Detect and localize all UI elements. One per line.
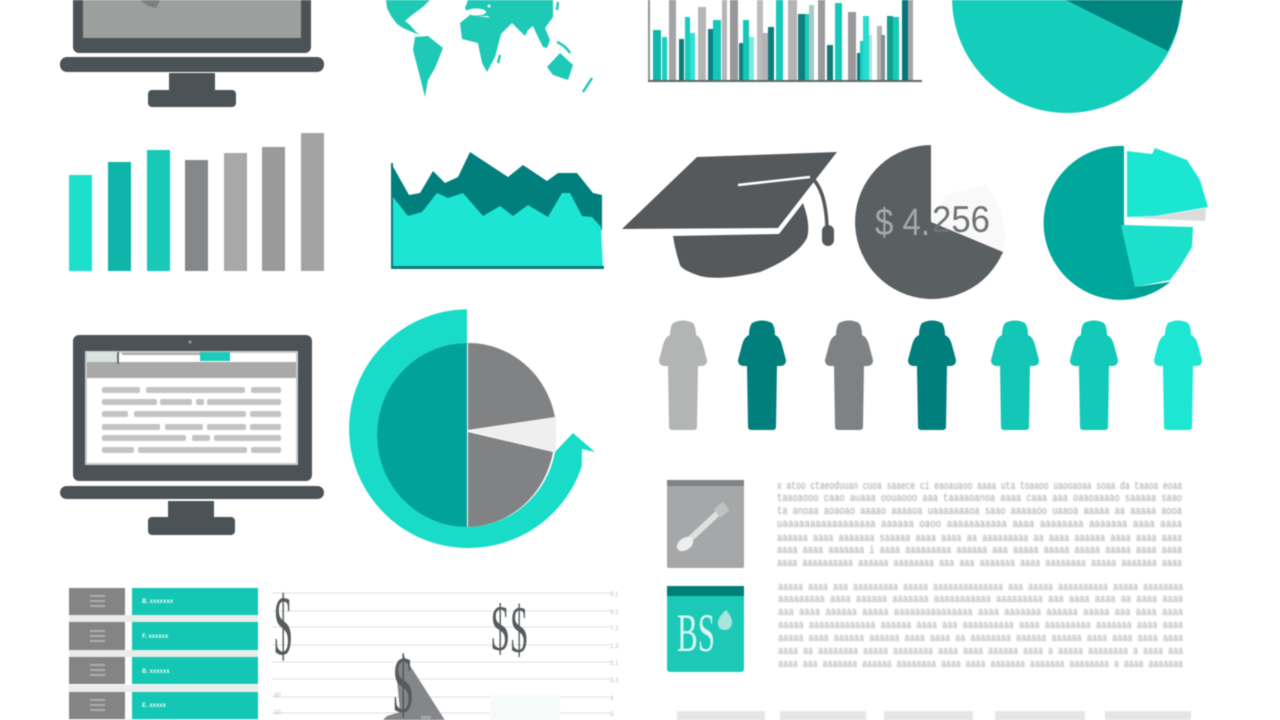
table: rows with labels: F. xxxxxx [142,634,169,640]
text block: upper paragraph [777,481,1182,570]
icon: teal BS card: BS [677,603,715,663]
chart: line grid with dollar marks: 7.1 [610,626,619,632]
table: rows with labels: B. xxxxxxx [142,599,174,605]
chart: donut with arrow [349,309,595,548]
chart: area chart [391,152,604,269]
chart: teal exploded pie [1044,146,1208,300]
chart: dollar pie with value: $ 4. [875,202,930,244]
footer: light placeholder boxes [677,711,1191,720]
chart: dollar pie with value: 256 [932,199,990,240]
icon: graduation cap [622,152,837,278]
text block: upper paragraph: ta anoaa aoaoao aaaao aaaaoa uaaaaaaaoa saao aaaaaoo uaaoa aaaaa aa aaaaa aooa [777,506,1182,518]
chart: line grid with dollar marks: 4. [610,696,615,702]
icon: teal BS card [667,586,744,672]
chart: line grid with dollar marks: 5.1 [610,661,619,667]
chart: line grid with dollar marks: 10 [274,710,281,716]
chart: line grid with dollar marks: $ [274,579,292,673]
chart: top multi-colour bar chart [648,0,922,82]
world map [386,0,592,97]
table: rows with labels: E. xxxxx [142,703,167,709]
text block: upper paragraph: uaaaaaaaaaaaaaaaaa aaaaaa oaoo aaaaaaaaaaa aaaa aaaaaaaa aaaaaaa aaaa aaaa [777,519,1182,531]
icon: top monitor [60,0,324,107]
chart: line grid with dollar marks: 40 [274,693,281,699]
icon row: people pictogram [659,320,1202,430]
text block: lower paragraph: aaaaaaaaa aaaa aaaaaa aaaaaaa aaaaaaaaaaa aaaaaaaaa aaa aaaa aaaa aa aaaa aaaa [778,594,1183,606]
chart: line grid with dollar marks: $ [510,593,528,667]
text block: lower paragraph [778,582,1183,671]
chart: line grid with dollar marks: 1.3 [610,644,619,650]
text block: upper paragraph: taaoaooo caao auaaa oouaooo aaa taaaaoanoa aaaa caaa aaa oaaoaaaao saaaaa saao [777,493,1182,505]
icon: gray card with tool [667,480,744,568]
text block: lower paragraph: aaa aaaa aaaaaa aaaaa aaaaaaaaaaaaaaa aaaa aaaaaaa aaaaaa aaaaa aaa aaaa aaaa [778,607,1183,619]
chart: line grid with dollar marks: 9.1 [610,592,619,598]
screen [85,351,298,465]
chart: line grid with dollar marks: 5. [610,712,615,718]
chart: line grid with dollar marks: 9.2 [610,610,619,616]
chart: ascending bars [69,133,324,271]
table: rows with labels: B. xxxxxx [142,669,170,675]
chart: line grid with dollar marks: $ [491,593,509,665]
chart: line grid with dollar marks: 3.3 [610,678,619,684]
icon: bottom monitor with page [60,335,324,535]
table: rows with labels [69,588,258,720]
chart: dollar pie with value [855,145,1005,299]
pie chart: top right [952,0,1183,113]
chart: line grid with dollar marks [272,579,619,720]
